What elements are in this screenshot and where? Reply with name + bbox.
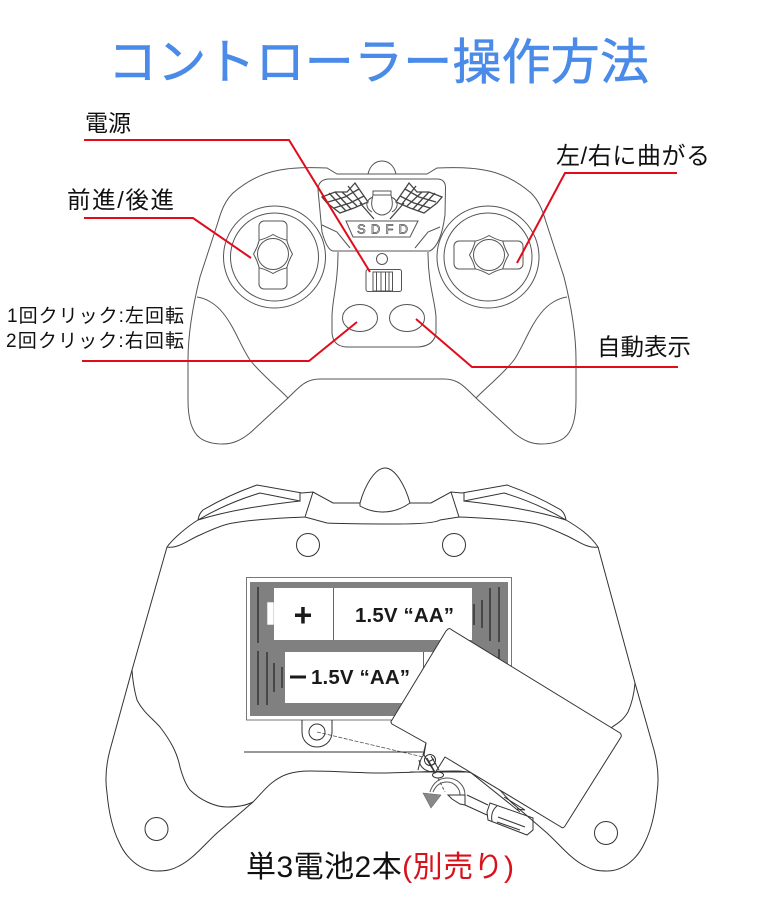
battery two: 1.5V “AA” bbox=[311, 666, 410, 689]
callout: rotation button: 2回クリック:右回転 bbox=[6, 330, 184, 352]
callout: left right turn bbox=[517, 143, 710, 263]
battery note: 単3電池2本(別売り) bbox=[246, 851, 514, 884]
emblem right flag bbox=[390, 183, 442, 219]
right stick bbox=[437, 206, 539, 308]
compartment stripes bbox=[258, 587, 499, 705]
callout: forward and back: 前進/後進 bbox=[67, 187, 174, 213]
battery two bbox=[285, 652, 450, 703]
emblem center shield bbox=[367, 191, 397, 215]
logo plate: SDFD bbox=[357, 222, 408, 236]
cover notch detail bbox=[410, 743, 525, 812]
lower stem panel bbox=[332, 252, 436, 347]
bottom controller: back view bbox=[106, 468, 658, 871]
controller body outline bbox=[188, 168, 576, 444]
callout: rotation button: 1回クリック:左回転 bbox=[7, 305, 184, 327]
center bump bbox=[360, 468, 410, 512]
body outline bbox=[106, 547, 658, 871]
battery one: 1.5V “AA” bbox=[355, 604, 454, 627]
rotation arrow bbox=[423, 778, 465, 808]
callout: auto display bbox=[416, 319, 691, 367]
callout: power bbox=[84, 110, 370, 272]
battery one bbox=[267, 588, 472, 640]
callout: rotation button bbox=[6, 305, 357, 361]
right grip line bbox=[476, 297, 567, 398]
screw holes bbox=[145, 534, 618, 844]
callout: forward and back bbox=[67, 187, 251, 258]
power switch bbox=[366, 270, 402, 292]
battery compartment bbox=[246, 578, 512, 720]
left grip line bbox=[132, 670, 253, 807]
left button bbox=[342, 304, 378, 332]
callout: left right turn: 左/右に曲がる bbox=[556, 143, 710, 170]
top controller: front view bbox=[188, 161, 576, 444]
callout: power: 電源 bbox=[85, 110, 131, 136]
callout: auto display: 自動表示 bbox=[597, 334, 691, 360]
screw tab bbox=[244, 720, 423, 757]
screwdriver bbox=[448, 795, 533, 835]
left grip line bbox=[197, 297, 288, 398]
emblem left flag bbox=[322, 183, 374, 219]
panel side lines bbox=[322, 225, 440, 248]
battery cover bbox=[391, 629, 621, 828]
left stick bbox=[224, 206, 326, 308]
screw bbox=[419, 754, 445, 792]
right button bbox=[390, 304, 424, 332]
logo plate bbox=[346, 221, 418, 237]
center panel bbox=[318, 179, 446, 251]
right grip line bbox=[611, 683, 635, 728]
battery one: + bbox=[294, 597, 312, 633]
left shoulder bbox=[167, 485, 598, 547]
small indicator bbox=[376, 254, 388, 264]
title: コントローラー操作方法 bbox=[108, 36, 649, 90]
antenna bump bbox=[368, 161, 396, 174]
